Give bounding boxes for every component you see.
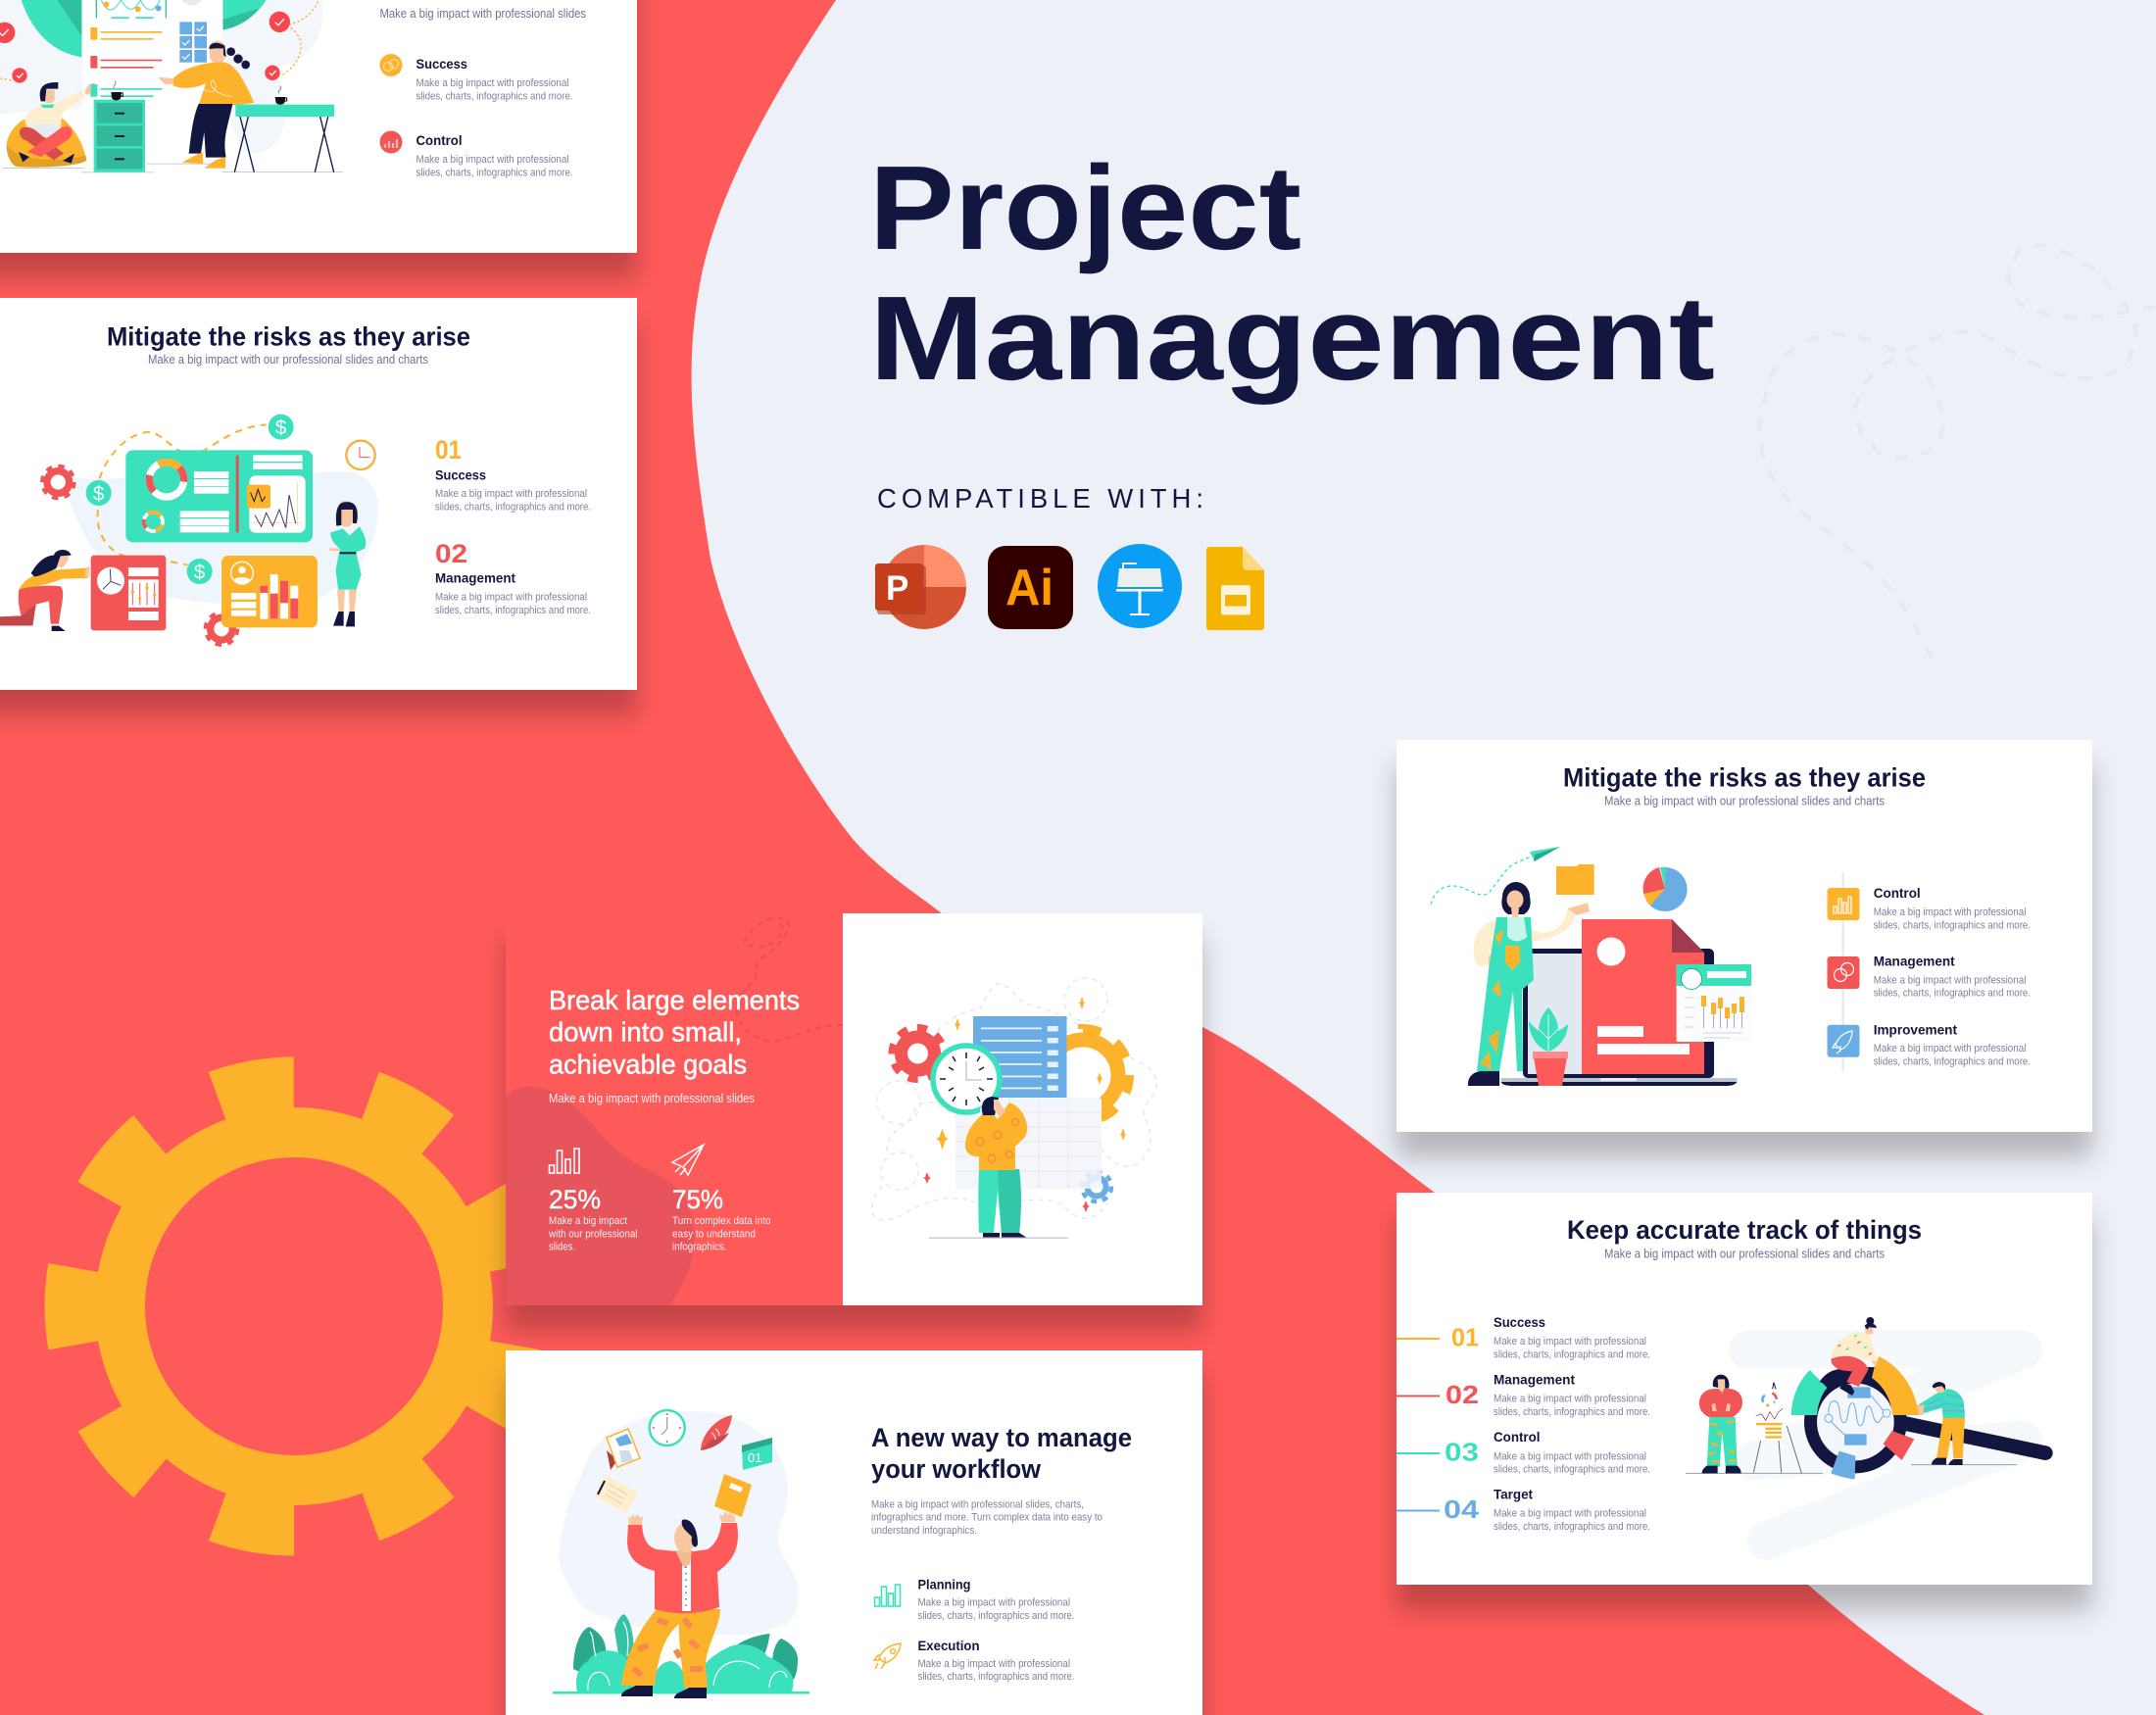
list item 01: slides, charts, infographics and more. — [1494, 1348, 1650, 1360]
list item: Control — [380, 131, 572, 178]
list item: Execution: Make a big impact with professional — [917, 1658, 1070, 1670]
subtitle: Make a big impact with professional slides — [380, 7, 586, 21]
icon: Keynote — [1098, 544, 1182, 628]
paragraph: infographics and more. Turn complex data into easy to — [871, 1512, 1102, 1524]
illustration: man with clock and checklist — [872, 978, 1156, 1239]
stat: 75%: easy to understand — [672, 1228, 756, 1240]
list item: Management: Make a big impact with professional — [1874, 974, 2026, 986]
trousers — [621, 1609, 720, 1688]
list item 02: Make a big impact with professional — [1494, 1394, 1646, 1405]
list item: Management — [1827, 954, 2031, 1000]
list item: Planning — [874, 1577, 1074, 1622]
heading: Break large elements — [549, 985, 800, 1015]
stat: 75%: 75% — [672, 1185, 723, 1214]
darker blob — [506, 1087, 694, 1305]
plants — [573, 1614, 798, 1692]
list item: Planning: slides, charts, infographics and more. — [917, 1610, 1074, 1622]
list item: Improvement: Make a big impact with professional — [1874, 1043, 2026, 1054]
list item: Control: Control — [1874, 885, 1921, 901]
stat: 25%: 25% — [549, 1185, 601, 1214]
dashed decoration — [737, 918, 843, 1041]
compatible with label: COMPATIBLE WITH: — [877, 483, 1203, 514]
icon: Illustrator — [988, 546, 1073, 629]
list item: Success: slides, charts, infographics and more. — [416, 90, 572, 102]
heading: Mitigate the risks as they arise — [1563, 763, 1926, 793]
list item: Execution: slides, charts, infographics and more. — [917, 1671, 1074, 1683]
stat: 75% — [672, 1185, 770, 1253]
icon: PowerPoint: P — [886, 569, 908, 608]
jacket and arms — [627, 1523, 738, 1613]
heading — [871, 1423, 1132, 1484]
subheading: Make a big impact with our professional slides and charts — [1604, 1248, 1885, 1261]
timeline line — [1842, 872, 1844, 1071]
stat: 25%: with our professional — [548, 1228, 637, 1240]
list item 01 Success: slides, charts, infographics and more. — [435, 502, 591, 514]
panel: mitigate the risks slide (left) — [0, 298, 637, 690]
title: Project — [869, 141, 1301, 274]
background dashed path decoration — [1759, 245, 2156, 669]
list item: Control: slides, charts, infographics and more. — [1874, 919, 2031, 931]
list item 01: 01 — [1451, 1322, 1479, 1351]
illustration: magnifier and team — [1686, 1317, 2045, 1479]
stat: 25%: Make a big impact — [549, 1215, 627, 1227]
subheading: Make a big impact with professional slides — [549, 1092, 755, 1105]
list item: Management: Management — [1874, 954, 1955, 969]
list item 02 Management: slides, charts, infographics and more. — [435, 605, 591, 616]
heading: Keep accurate track of things — [1567, 1215, 1922, 1245]
list item: Improvement: Improvement — [1874, 1021, 1957, 1037]
panel: keep accurate track slide — [1396, 1193, 2092, 1585]
list item 03: slides, charts, infographics and more. — [1494, 1464, 1650, 1476]
illustration: dashboards and team — [0, 415, 378, 644]
illustration: juggling man — [553, 1410, 809, 1698]
stat: 75%: Turn complex data into — [672, 1215, 770, 1227]
list item 02: Management — [1494, 1371, 1575, 1387]
list item 04 — [1396, 1486, 1650, 1533]
icon: PowerPoint — [875, 545, 966, 629]
paragraph — [871, 1498, 1102, 1537]
stat: 25% — [548, 1185, 637, 1253]
list item: Improvement: slides, charts, infographics and more. — [1874, 1055, 2031, 1067]
list item 03 — [1396, 1429, 1650, 1476]
list item 01: Success — [1494, 1314, 1545, 1330]
illustration: team at task board — [0, 0, 343, 172]
list item 01: Make a big impact with professional — [1494, 1336, 1646, 1348]
list item 04: 04 — [1444, 1494, 1480, 1524]
list item: Planning: Make a big impact with professional — [917, 1597, 1070, 1609]
heading: Mitigate the risks as they arise — [107, 321, 470, 351]
list item: Execution: Execution — [917, 1638, 980, 1653]
panel: break large elements slide — [506, 913, 1202, 1305]
stat: 25%: slides. — [549, 1242, 575, 1253]
list item 02 Management: Make a big impact with professional — [435, 592, 587, 604]
list item 01 Success — [435, 435, 591, 514]
list item 01 Success: Make a big impact with professional — [435, 488, 587, 500]
list item: Success: Make a big impact with professional — [416, 77, 568, 89]
list item 02 Management — [435, 539, 591, 616]
list item: Control: Make a big impact with professional — [416, 154, 568, 166]
list item 01 Success: Success — [435, 466, 486, 482]
list item 02 — [1396, 1371, 1650, 1418]
panel: new way to manage slide — [506, 1350, 1202, 1715]
icon: paper plane — [672, 1145, 704, 1175]
paragraph: understand infographics. — [871, 1525, 977, 1537]
subheading: Make a big impact with our professional slides and charts — [1604, 795, 1885, 808]
list item 03: Control — [1494, 1429, 1541, 1445]
illustration: woman with document and laptop — [1431, 847, 1751, 1086]
icon: bars — [549, 1149, 579, 1173]
list item 02 Management: Management — [435, 570, 515, 586]
list item 02: 02 — [1446, 1380, 1479, 1409]
illustration: dashboards and team: $ — [275, 416, 287, 439]
list item: Execution — [874, 1638, 1074, 1683]
juggled items — [595, 1410, 772, 1517]
list item 04: Make a big impact with professional — [1494, 1508, 1646, 1520]
red side panel — [506, 913, 843, 1305]
icon: Illustrator: Ai — [1005, 560, 1054, 616]
list item 01 — [1396, 1314, 1650, 1360]
panel: top left slide — [0, 0, 637, 253]
illustration: dashboards and team: $ — [93, 482, 105, 505]
paragraph: Make a big impact with professional slides, charts, — [871, 1498, 1084, 1510]
list item: Management: slides, charts, infographics and more. — [1874, 988, 2031, 1000]
list item: Improvement — [1827, 1021, 2031, 1067]
subheading: Make a big impact with our professional slides and charts — [148, 353, 428, 367]
background scribble — [1748, 1349, 2023, 1541]
title: Management — [869, 271, 1715, 405]
list item 03: 03 — [1445, 1438, 1479, 1467]
list item: Success: Success — [416, 56, 467, 72]
list item 04: slides, charts, infographics and more. — [1494, 1521, 1650, 1533]
heading: your workflow — [871, 1454, 1042, 1484]
title — [869, 141, 1715, 405]
list item: Success — [380, 54, 572, 102]
list item 01 Success: 01 — [435, 435, 462, 465]
icon: Google Slides — [1206, 547, 1264, 630]
illustration: dashboards and team: $ — [194, 561, 206, 583]
large yellow gear — [71, 1082, 517, 1531]
list item: Planning: Planning — [917, 1577, 970, 1592]
list item 02 Management: 02 — [435, 539, 467, 568]
stat: 75%: infographics. — [672, 1242, 727, 1253]
panel: mitigate the risks slide (right) — [1396, 740, 2092, 1132]
list item 02: slides, charts, infographics and more. — [1494, 1406, 1650, 1418]
list item: Control: Make a big impact with professional — [1874, 906, 2026, 918]
heading: achievable goals — [549, 1050, 747, 1080]
list item 03: Make a big impact with professional — [1494, 1450, 1646, 1462]
heading — [549, 985, 800, 1080]
list item: Control: Control — [416, 132, 463, 148]
heading: down into small, — [549, 1017, 742, 1048]
list item 04: Target — [1494, 1486, 1533, 1501]
list item: Control — [1827, 885, 2031, 931]
heading: A new way to manage — [871, 1423, 1132, 1452]
juggled items: 01 — [748, 1450, 761, 1465]
list item: Control: slides, charts, infographics and more. — [416, 167, 572, 178]
